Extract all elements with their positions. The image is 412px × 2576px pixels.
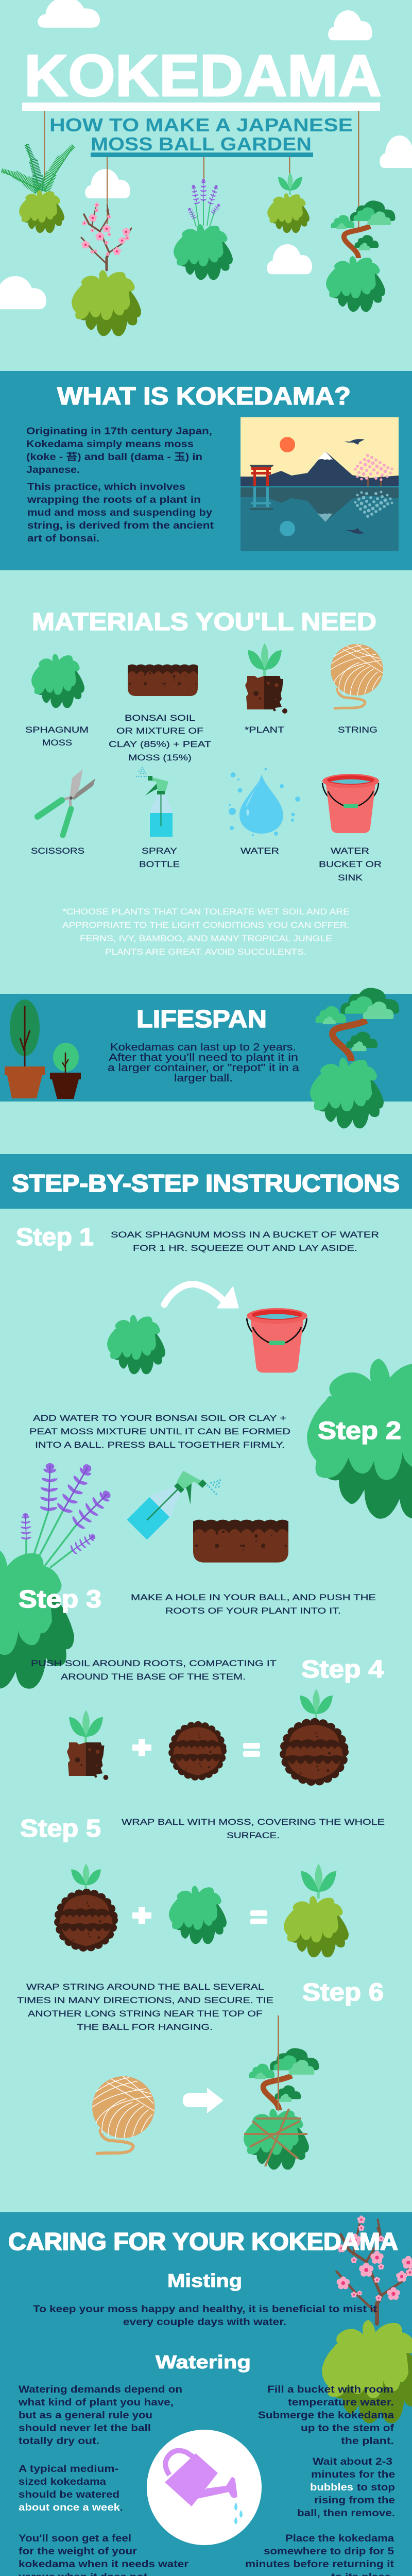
subtitle: HOW TO MAKE A JAPANESE: [49, 114, 353, 135]
icon: potted trees: [5, 999, 81, 1099]
watering tips: left column: what kind of plant you have,: [18, 2397, 174, 2408]
watering tips: right column: somewhere to drip for 5: [264, 2546, 394, 2557]
material: water bucket: [319, 774, 382, 883]
material: bonsai soil: CLAY (85%) + PEAT: [109, 739, 211, 749]
equals sign: [250, 1910, 267, 1924]
watering tips: right column: minutes before returning it: [245, 2559, 394, 2570]
misting: Misting: [167, 2270, 242, 2291]
hanging fern kokedama: [2, 144, 74, 233]
watering tips: left column: You'll soon get a feel: [19, 2533, 131, 2544]
panel: caring for your kokedama: [0, 2212, 412, 2576]
material: spray bottle: SPRAY: [142, 846, 177, 856]
instructions: ROOTS OF YOUR PLANT INTO IT.: [165, 1606, 341, 1616]
heading: LIFESPAN: [136, 1006, 267, 1033]
clouds: [0, 0, 412, 309]
watering tips: left column: but as a general rule you: [19, 2410, 152, 2421]
text block: definition: art of bonsai.: [27, 533, 99, 544]
watering tips: right column: the plant.: [341, 2436, 394, 2447]
panel: step 1: [16, 1224, 379, 1374]
title: KOKEDAMA: [24, 43, 382, 109]
instructions: AROUND THE BASE OF THE STEM.: [61, 1672, 246, 1682]
text block: larger ball.: [174, 1073, 233, 1084]
watering tips: left column: sized kokedama: [19, 2477, 106, 2487]
watering tips: left column: should be watered: [19, 2489, 119, 2500]
watering tips: right column: Place the kokedama: [285, 2533, 394, 2544]
watering tips: left column: .: [120, 2502, 123, 2513]
material: plant: *PLANT: [245, 725, 284, 735]
material: water bucket: BUCKET OR: [319, 859, 382, 869]
label: Step 1: [16, 1224, 94, 1251]
arrow: [183, 2088, 224, 2113]
arrow: [164, 1284, 238, 1308]
material: spray bottle: [136, 767, 180, 869]
label: Step 5: [20, 1815, 101, 1842]
watering tips: left column: kokedama when it needs water: [19, 2559, 189, 2570]
material: bonsai soil: OR MIXTURE OF: [116, 726, 203, 736]
instructions: [31, 1658, 277, 1682]
watering tips: right column: Wait about 2-3: [313, 2456, 392, 2467]
big moss: [0, 1549, 74, 1689]
heading: CARING FOR YOUR KOKEDAMA: [8, 2228, 398, 2255]
label: Step 6: [302, 1979, 384, 2006]
cherry blossom kokedama: [322, 2215, 412, 2424]
material: sphagnum moss: SPHAGNUM: [25, 725, 89, 735]
panel: step 5: [20, 1815, 385, 1957]
instructions: SURFACE.: [227, 1831, 280, 1840]
ball of string: [92, 2076, 154, 2154]
instructions: WRAP BALL WITH MOSS, COVERING THE WHOLE: [122, 1817, 385, 1827]
heading: MATERIALS YOU'LL NEED: [32, 608, 376, 636]
hanging seedling kokedama: [267, 172, 310, 233]
torii gate: [251, 466, 271, 486]
watering tips: right column: Fill a bucket with room: [267, 2384, 393, 2395]
soil: [193, 1520, 288, 1563]
material: scissors: SCISSORS: [31, 846, 84, 856]
text block: definition: wrapping the roots of a plant in: [27, 495, 201, 505]
instructions: ADD WATER TO YOUR BONSAI SOIL OR CLAY +: [33, 1413, 286, 1423]
material: water bucket: WATER: [331, 846, 369, 856]
sun: [280, 437, 295, 452]
plus sign: [132, 1907, 151, 1924]
panel: materials: [25, 608, 383, 957]
footnote: APPROPRIATE TO THE LIGHT CONDITIONS YOU CAN OFFER.: [62, 920, 350, 930]
material: bonsai soil: BONSAI SOIL: [125, 713, 195, 723]
cherry trees: [367, 477, 382, 486]
soil ball with plant: [284, 1689, 344, 1781]
icon: bonsai kokedama: [310, 988, 399, 1128]
panel: what is kokedama: [0, 371, 412, 570]
material: string: [331, 644, 383, 735]
instructions: PEAT MOSS MIXTURE UNTIL IT CAN BE FORMED: [29, 1427, 290, 1436]
instructions: PUSH SOIL AROUND ROOTS, COMPACTING IT: [31, 1658, 277, 1668]
hanging lavender kokedama: [174, 179, 233, 280]
plus sign: [132, 1739, 151, 1756]
label: Step 4: [301, 1656, 384, 1683]
panel: step 4: [31, 1656, 384, 1781]
footnote: PLANTS ARE GREAT. AVOID SUCCULENTS.: [105, 947, 306, 957]
text block: a larger container, or "repot" it in a: [108, 1062, 300, 1074]
instructions: TIMES IN MANY DIRECTIONS, AND SECURE. TIE: [17, 1995, 273, 2005]
hanging strings: [44, 111, 359, 231]
text block: definition: Originating in 17th century Japan,: [26, 426, 212, 437]
panel: step-by-step heading band: STEP-BY-STEP INSTRUCTIONS: [12, 1170, 400, 1197]
watering tips: right column: bubbles: [310, 2482, 353, 2493]
spray bottle: [127, 1453, 227, 1552]
text block: definition: Japanese.: [26, 465, 80, 476]
misting: every couple days with water.: [123, 2317, 286, 2328]
illustration: japanese landscape: [241, 417, 399, 551]
footnote: [62, 907, 350, 957]
title bar: [22, 103, 380, 111]
material: water bucket: SINK: [338, 873, 363, 883]
text block: definition: [26, 426, 214, 544]
watering tips: right column: minutes for the: [311, 2469, 395, 2480]
moss covered ball with plant: [284, 1863, 349, 1957]
material: bonsai soil: MOSS (15%): [128, 753, 192, 762]
instructions: ANOTHER LONG STRING NEAR THE TOP OF: [28, 2009, 263, 2019]
text block: definition: Kokedama simply means moss: [26, 439, 194, 450]
material: bonsai soil: [109, 665, 211, 762]
soil ball: [173, 1725, 222, 1776]
panel: lifespan: [0, 988, 412, 1128]
label: Step 2: [318, 1417, 401, 1445]
panel: step 2: [29, 1359, 412, 1563]
instructions: INTO A BALL. PRESS BALL TOGETHER FIRMLY.: [35, 1440, 285, 1450]
soil ball with plant: [59, 1863, 113, 1947]
material: spray bottle: BOTTLE: [139, 859, 180, 869]
material: water: [229, 768, 300, 856]
watering tips: right column: to stop: [357, 2482, 395, 2493]
equals sign: [243, 1743, 260, 1757]
instructions: THE BALL FOR HANGING.: [77, 2022, 213, 2032]
heading: WHAT IS KOKEDAMA?: [57, 383, 351, 410]
text block: definition: This practice, which involves: [27, 482, 185, 493]
instructions: [111, 1230, 379, 1253]
watering heading: Watering: [156, 2351, 251, 2372]
material: plant: [245, 643, 287, 735]
watering tips: right column: up to the stem of: [301, 2423, 394, 2434]
panel: header: [0, 0, 412, 336]
instructions: [17, 1982, 273, 2032]
bucket: [247, 1308, 307, 1372]
misting: To keep your moss happy and healthy, it is beneficial to mist it: [33, 2304, 377, 2315]
material: sphagnum moss: MOSS: [42, 738, 72, 748]
watering tips: left column: totally dry out.: [19, 2436, 99, 2447]
footnote: *CHOOSE PLANTS THAT CAN TOLERATE WET SOIL AND ARE: [62, 907, 350, 917]
subtitle: MOSS BALL GARDEN: [91, 133, 312, 155]
material: water: WATER: [241, 846, 279, 856]
plant with root soil: [67, 1710, 108, 1780]
panel: step 3: [0, 1461, 376, 1689]
moss: [169, 1886, 227, 1944]
icon: watering can: [147, 2430, 262, 2545]
mountains: [241, 451, 399, 486]
instructions: FOR 1 HR. SQUEEZE OUT AND LAY ASIDE.: [133, 1243, 357, 1253]
instructions: [122, 1817, 385, 1840]
instructions: MAKE A HOLE IN YOUR BALL, AND PUSH THE: [131, 1592, 376, 1602]
moss ball: [107, 1315, 165, 1374]
text block: definition: mud and moss and suspending by: [27, 507, 212, 518]
subtitle: [49, 114, 353, 157]
watering tips: left column: [18, 2384, 189, 2576]
strung bonsai kokedama: [244, 2015, 319, 2170]
watering tips: right column: ball, then remove.: [297, 2508, 395, 2519]
label: Step 3: [19, 1586, 101, 1613]
bird: [344, 439, 365, 445]
watering tips: left column: about once a week: [19, 2502, 120, 2513]
misting: [33, 2270, 377, 2328]
watering tips: right column: rising from the: [314, 2495, 395, 2506]
hanging cherry blossom kokedama: [72, 202, 141, 336]
watering tips: right column: Submerge the kokedama: [258, 2410, 394, 2421]
material: string: STRING: [338, 725, 377, 735]
text block: definition: (koke - 苔) and ball (dama - 玉) in: [26, 451, 202, 463]
material: scissors: [31, 769, 95, 856]
panel: step 6: [17, 1979, 384, 2170]
instructions: [131, 1592, 376, 1616]
panel: step-by-step heading band: [0, 1154, 412, 1209]
instructions: [29, 1413, 290, 1450]
watering tips: left column: Watering demands depend on: [19, 2384, 182, 2395]
text block: After that you'll need to plant it in: [109, 1052, 298, 1063]
instructions: WRAP STRING AROUND THE BALL SEVERAL: [26, 1982, 264, 1992]
material: sphagnum moss: [25, 654, 89, 748]
watering tips: right column: temperature water.: [288, 2397, 394, 2408]
text block: Kokedamas can last up to 2 years.: [110, 1042, 296, 1053]
watering tips: left column: should never let the ball: [19, 2423, 151, 2434]
big moss: [307, 1359, 412, 1519]
text block: definition: string, is derived from the ancient: [27, 520, 214, 531]
text block: [108, 1042, 300, 1084]
watering tips: left column: for the weight of your: [19, 2546, 138, 2557]
footnote: FERNS, IVY, BAMBOO, AND MANY TROPICAL JUNGLE: [80, 934, 332, 943]
hanging bonsai kokedama: [326, 200, 396, 312]
instructions: SOAK SPHAGNUM MOSS IN A BUCKET OF WATER: [111, 1230, 379, 1240]
watering tips: right column: [245, 2384, 395, 2576]
watering tips: left column: A typical medium-: [19, 2464, 118, 2475]
lavender: [20, 1461, 115, 1568]
